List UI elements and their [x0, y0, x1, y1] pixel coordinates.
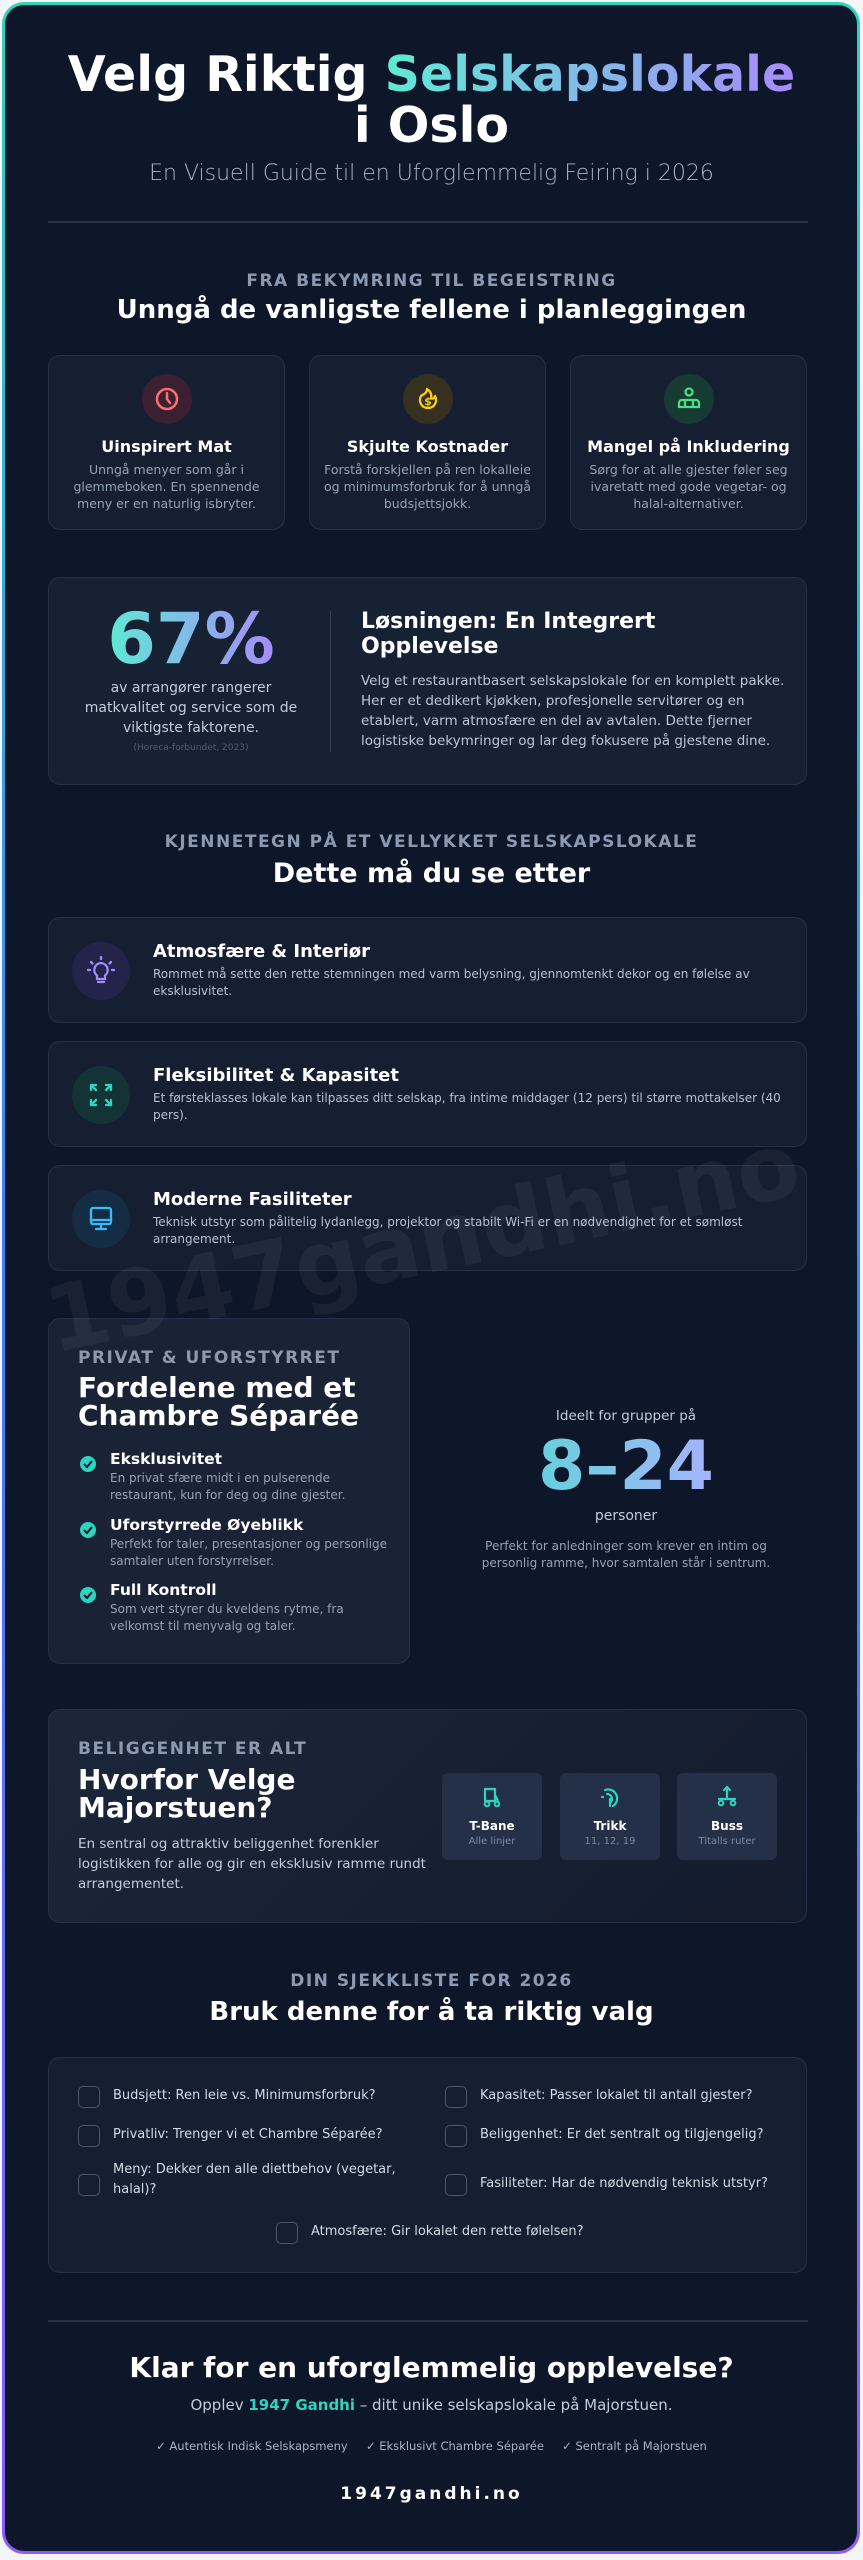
heading: dette må du se etter: Dette må du se etter — [273, 858, 590, 889]
icon: check — [80, 1587, 96, 1603]
panel: skjulte kostnader — [309, 355, 546, 530]
solution text: Velg et restaurantbasert selskapslokale for en komplett pakke. Her er et dedikert kjøkken, profesjonelle servitører og en etablert, varm atmosfære en del av avtalen. Dette fjerner logistiske bekymringer og lar deg fokusere på gjestene dine. — [361, 673, 784, 749]
feature title: Atmosfære & Interiør — [153, 941, 370, 962]
icon: clock — [142, 374, 192, 424]
item: uforstyrrede øyeblikk — [80, 1516, 387, 1568]
stat text: av arrangører rangerer matkvalitet og service som de viktigste faktorene. — [85, 680, 297, 736]
icon: people — [664, 374, 714, 424]
item: eksklusivitet: Eksklusivitet — [110, 1450, 222, 1468]
panel: checklist: Budsjett: Ren leie vs. Minimumsforbruk? — [113, 2088, 376, 2103]
stat: group size — [482, 1408, 770, 1570]
card text: Sørg for at alle gjester føler seg ivaretatt med gode vegetar- og halal-alternativer. — [589, 462, 788, 511]
panel: mangel på inkludering — [570, 355, 807, 530]
kicker: fra bekymring: FRA BEKYMRING TIL BEGEISTRING — [246, 271, 617, 291]
url: 1947gandhi.no — [340, 2484, 523, 2504]
feature: fleksibilitet — [48, 1041, 807, 1147]
panel: checklist — [48, 2057, 807, 2273]
stat: group size: Ideelt for grupper på — [556, 1408, 696, 1424]
icon: expand arrows — [72, 1066, 130, 1124]
item: full kontroll — [80, 1581, 344, 1633]
icon: money — [403, 374, 453, 424]
panel: solution — [48, 577, 807, 785]
heading: checklist: Bruk denne for å ta riktig valg — [209, 1997, 654, 2027]
card title: Uinspirert Mat — [101, 437, 232, 456]
subtitle: En Visuell Guide til en Uforglemmelig Feiring i 2026 — [149, 161, 714, 186]
title — [68, 46, 795, 154]
panel: checklist: Kapasitet: Passer lokalet til antall gjester? — [480, 2088, 753, 2103]
kicker: kjennetegn: KJENNETEGN PÅ ET VELLYKKET SELSKAPSLOKALE — [165, 832, 698, 852]
text: En sentral og attraktiv beliggenhet forenkler logistikken for alle og gir en eksklusiv ramme rundt arrangementet. — [78, 1836, 426, 1892]
panel: uinspirert mat — [48, 355, 285, 530]
panel: checklist: Atmosfære: Gir lokalet den rette følelsen? — [311, 2224, 584, 2239]
stat 67%: 67% — [107, 598, 275, 680]
transport: trikk: 11, 12, 19 — [585, 1836, 635, 1847]
panel: chambre séparée — [48, 1318, 410, 1664]
feature text: Teknisk utstyr som pålitelig lydanlegg, projektor og stabilt Wi-Fi er en nødvendighet for et sømløst arrangement. — [153, 1215, 742, 1246]
feature: atmosfære — [48, 917, 807, 1023]
panel: checklist: Beliggenhet: Er det sentralt og tilgjengelig? — [480, 2127, 764, 2142]
item: eksklusivitet — [80, 1450, 345, 1502]
item: full kontroll: Full Kontroll — [110, 1581, 217, 1599]
card title: Skjulte Kostnader — [347, 437, 508, 456]
icon: check — [80, 1456, 96, 1472]
icon: monitor — [72, 1190, 130, 1248]
stat: group size: personer — [595, 1508, 657, 1524]
feature: moderne fasiliteter — [48, 1165, 807, 1271]
icon: check — [80, 1522, 96, 1538]
stat: group size: Perfekt for anledninger som krever en intim og personlig ramme, hvor samtalen står i sentrum. — [482, 1539, 770, 1570]
cta bullets: ✓ Autentisk Indisk Selskapsmeny ✓ Eksklusivt Chambre Séparée ✓ Sentralt på Majorstuen — [156, 2439, 707, 2453]
cta heading: Klar for en uforglemmelig opplevelse? — [129, 2351, 734, 2384]
kicker: BELIGGENHET ER ALT — [78, 1739, 307, 1759]
item: uforstyrrede øyeblikk: Uforstyrrede Øyeblikk — [110, 1516, 303, 1534]
feature title: Moderne Fasiliteter — [153, 1189, 352, 1210]
kicker: PRIVAT & UFORSTYRRET — [78, 1348, 340, 1368]
feature text: Et førsteklasses lokale kan tilpasses ditt selskap, fra intime middager (12 pers) til større mottakelser (40 pers). — [153, 1091, 781, 1122]
item: eksklusivitet: En privat sfære midt i en pulserende restaurant, kun for deg og dine gjester. — [110, 1471, 345, 1502]
transport: buss: Buss — [711, 1819, 743, 1833]
kicker: sjekkliste: DIN SJEKKLISTE FOR 2026 — [290, 1971, 573, 1991]
transport: t-bane: T-Bane — [469, 1819, 515, 1833]
watermark: 1947gandhi.no — [36, 1112, 809, 1374]
cta text: Opplev 1947 Gandhi – ditt unike selskapslokale på Majorstuen. — [190, 2396, 673, 2414]
source: (Horeca-forbundet, 2023) — [134, 743, 248, 753]
transport: t-bane: Alle linjer — [469, 1836, 515, 1847]
panel: checklist: Meny: Dekker den alle diettbehov (vegetar, halal)? — [113, 2162, 396, 2197]
transport: trikk — [560, 1773, 660, 1860]
panel: beliggenhet — [48, 1709, 807, 1923]
card title: Mangel på Inkludering — [587, 437, 790, 456]
transport: buss: Titalls ruter — [698, 1836, 756, 1847]
heading: Hvorfor Velge Majorstuen? — [78, 1763, 295, 1824]
card text: Unngå menyer som går i glemmeboken. En spennende meny er en naturlig isbryter. — [73, 462, 260, 511]
transport: trikk: Trikk — [594, 1819, 626, 1833]
heading: pitfalls: Unngå de vanligste fellene i planleggingen — [117, 295, 746, 325]
panel: checklist: Fasiliteter: Har de nødvendig teknisk utstyr? — [480, 2176, 768, 2191]
feature title: Fleksibilitet & Kapasitet — [153, 1065, 399, 1086]
number 8–24: 8–24 — [538, 1427, 714, 1506]
transport: buss — [677, 1773, 777, 1860]
item: uforstyrrede øyeblikk: Perfekt for taler, presentasjoner og personlige samtaler uten forstyrrelser. — [110, 1537, 387, 1568]
card text: Forstå forskjellen på ren lokalleie og minimumsforbruk for å unngå budsjettsjokk. — [324, 462, 531, 511]
heading: Fordelene med et Chambre Séparée — [78, 1371, 359, 1432]
title: i Oslo — [354, 97, 509, 154]
icon: money: $ — [424, 395, 432, 408]
icon: bulb — [72, 942, 130, 1000]
title: Velg Riktig Selskapslokale — [68, 46, 795, 103]
panel: checklist: Privatliv: Trenger vi et Chambre Séparée? — [113, 2127, 383, 2142]
item: full kontroll: Som vert styrer du kveldens rytme, fra velkomst til menyvalg og taler. — [110, 1602, 344, 1633]
solution heading: Løsningen: En Integrert Opplevelse — [361, 609, 655, 659]
feature text: Rommet må sette den rette stemningen med varm belysning, gjennomtenkt dekor og en følelse av eksklusivitet. — [153, 967, 750, 998]
transport: t-bane — [442, 1773, 542, 1860]
